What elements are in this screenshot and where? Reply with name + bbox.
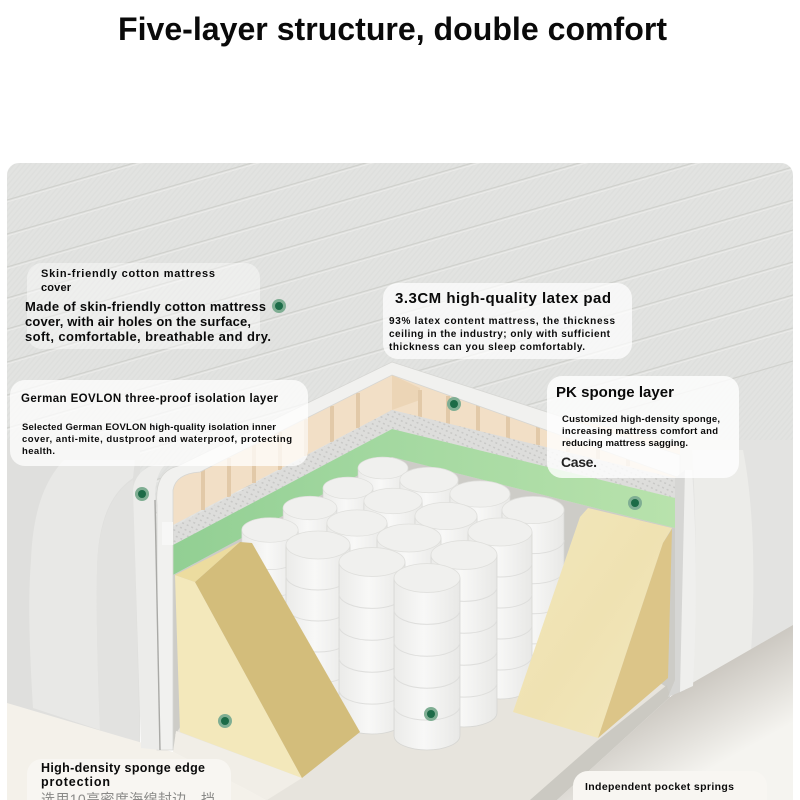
marker: latex pad: [447, 397, 461, 411]
callout: skin-friendly cotton mattress cover: cover: [41, 282, 72, 294]
cavity back wall: [173, 457, 675, 800]
callout: PK sponge layer: [547, 376, 739, 478]
callout: PK sponge layer: reducing mattress sagging.: [562, 438, 688, 449]
right mattress side with quilted lobes: [693, 450, 793, 682]
callout: latex pad: 93% latex content mattress, the thickness: [389, 316, 615, 327]
layer: PK sponge: [173, 429, 675, 575]
marker: isolation layer: [135, 487, 149, 501]
right edge-protection wedge: [513, 508, 672, 738]
layer: three-proof isolation band: [173, 410, 675, 545]
marker: cotton cover: [272, 299, 286, 313]
callout: skin-friendly cotton mattress cover: Skin-friendly cotton mattress: [41, 268, 215, 280]
pocket springs: [242, 457, 564, 750]
slab under left wedge: [173, 731, 302, 800]
callout: latex pad: ceiling in the industry; only with sufficient: [389, 329, 611, 340]
callout: latex pad: 3.3CM high-quality latex pad: [395, 290, 611, 307]
callout: German EOVLON isolation layer: cover, anti-mite, dustproof and waterproof, protecting: [22, 434, 292, 445]
callout: skin-friendly cotton mattress cover: soft, comfortable, breathable and dry.: [25, 329, 271, 344]
mattress top surface: [7, 163, 793, 556]
callout: German EOVLON isolation layer: German EOVLON three-proof isolation layer: [21, 393, 279, 405]
rim: white cover around the cut: [133, 362, 696, 750]
callout: skin-friendly cotton mattress cover: Made of skin-friendly cotton mattress: [25, 299, 266, 314]
callout: independent pocket springs: Independent pocket springs: [585, 781, 734, 793]
slab side strip: [530, 685, 670, 800]
callout: PK sponge layer: PK sponge layer: [556, 384, 674, 401]
callout: PK sponge layer: Case.: [561, 454, 597, 470]
marker: edge protection: [218, 714, 232, 728]
title: Five-layer structure, double comfort: [118, 11, 667, 47]
callout: skin-friendly cotton mattress cover: cover, with air holes on the surface,: [25, 314, 251, 329]
callout: PK sponge layer: Customized high-density sponge,: [562, 414, 720, 425]
marker: PK sponge: [628, 496, 642, 510]
callout: independent pocket springs: [573, 771, 767, 800]
callout: skin-friendly cotton mattress cover: [25, 263, 271, 349]
floor, bottom left: [7, 703, 267, 800]
marker: pocket springs: [424, 707, 438, 721]
left mattress side with quilted lobes: [7, 456, 140, 742]
callout: latex pad: [383, 283, 632, 359]
callout: PK sponge layer: increasing mattress comfort and: [562, 426, 718, 437]
callout: latex pad: thickness can you sleep comfortably.: [389, 342, 585, 353]
callout: high-density sponge edge protection: protection: [41, 775, 110, 789]
layer: latex pad: [174, 376, 630, 524]
cavity floor: [175, 684, 665, 800]
left edge-protection wedge: [175, 542, 360, 778]
mattress cutaway illustration: [7, 163, 793, 800]
floor shadow, bottom right: [557, 625, 793, 800]
callout: German EOVLON isolation layer: [10, 380, 308, 466]
callout: high-density sponge edge protection: [27, 759, 231, 800]
callout: high-density sponge edge protection: High-density sponge edge: [41, 761, 205, 775]
callout: German EOVLON isolation layer: health.: [22, 446, 55, 457]
callout: German EOVLON isolation layer: Selected German EOVLON high-quality isolation inner: [22, 422, 276, 433]
